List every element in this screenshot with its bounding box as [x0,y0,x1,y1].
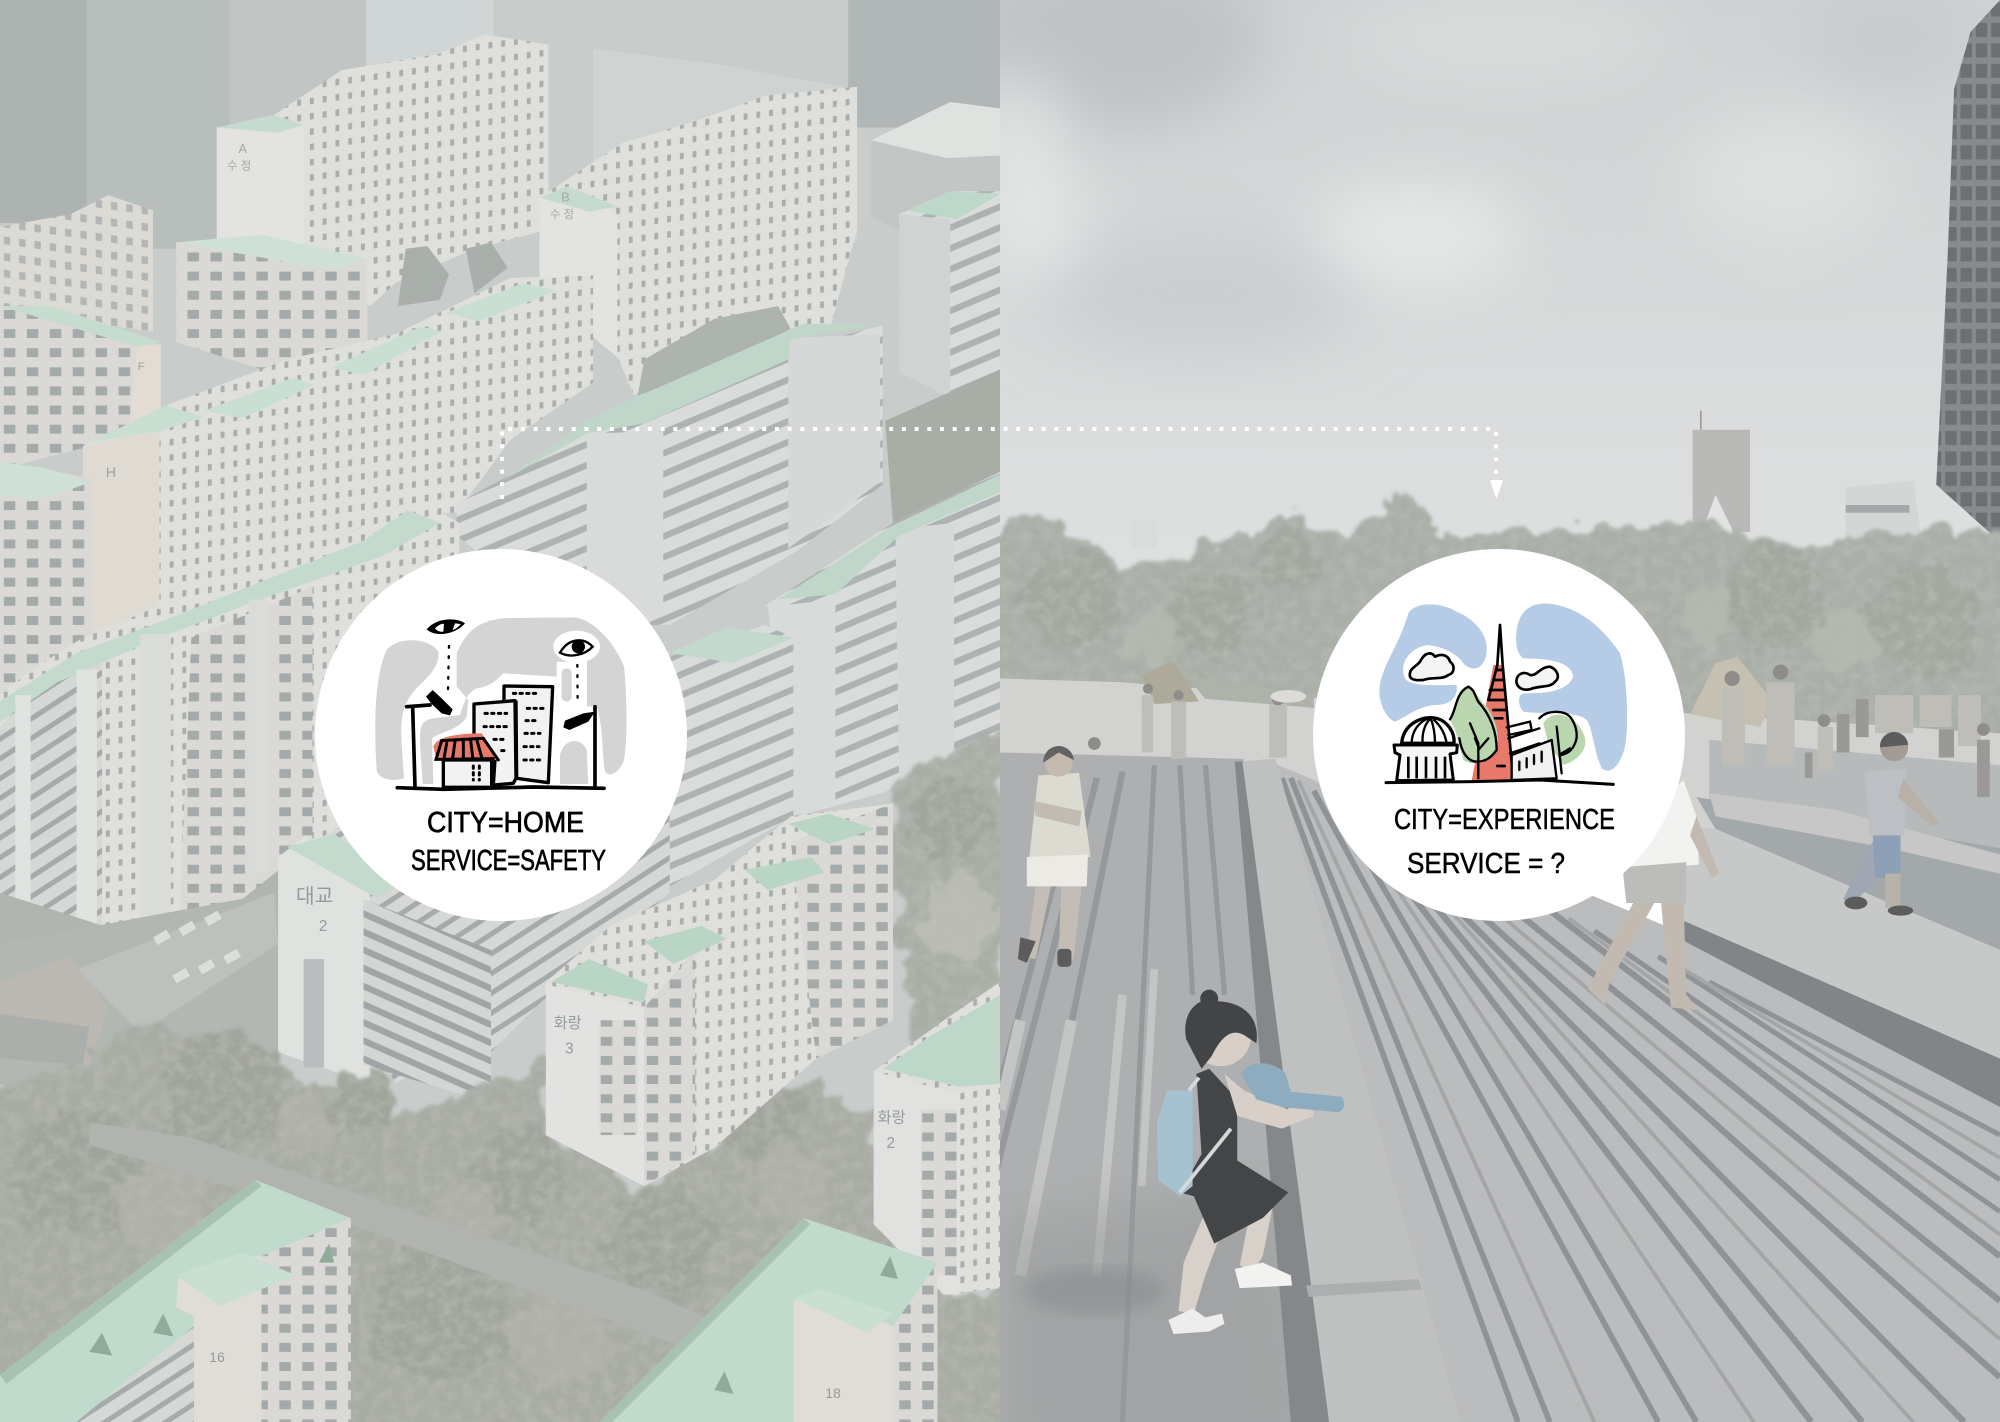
block B [540,87,857,395]
icon: surveillance over city sketch [375,617,626,789]
front left row [0,497,459,950]
building: block 16 [0,1180,351,1422]
right deck stripes fanning from vanishing point [1282,778,2000,1422]
long slab behind, upper row [457,324,1000,625]
windows [473,693,544,780]
red roof [433,733,498,761]
block B: 수 정 [550,208,574,221]
watching eyes [427,619,465,634]
road [90,1122,700,1345]
sky with clouds [1000,0,2000,572]
modern building [1512,740,1557,780]
ground line [1386,780,1613,784]
far plaza ground [1000,661,2000,918]
building: 화랑 3 block [546,803,893,1186]
trees at the right edge [890,730,1000,1044]
building: 대교 block: 대교 [296,885,333,908]
building: 대교 block [278,829,670,1103]
caption: service equals question mark: SERVICE = ? [1407,848,1565,880]
person: woman in checked shorts [1588,781,1719,1010]
circle: city as experience [1313,549,1685,921]
block F and right-hand tower [899,191,1000,408]
ground line and lamp posts [397,705,604,789]
building: 화랑 3 block: 화랑 [554,1015,582,1032]
side-on balcony blocks: F [138,361,145,373]
panel: aerial photo of apartment blocks [0,0,1046,1422]
block H row [0,275,593,714]
central mass below [0,650,670,1084]
caption: city equals home: CITY=HOME [427,807,584,839]
sight lines [448,646,578,704]
person: girl with water gun [1024,990,1344,1334]
building: block 16: 16 [209,1349,225,1365]
caption: service equals safety: SERVICE=SAFETY [411,845,606,877]
building: 화랑 3 block: 3 [565,1040,574,1057]
person: boy by water [1843,732,1939,916]
clouds [1410,653,1558,690]
parking and road [0,893,279,1087]
skyline towers [1692,0,2000,537]
distant crowd [1088,657,1990,797]
deck shadow and dark lower part [1011,1200,1290,1422]
tree right [1543,715,1585,765]
water pool and raised slab [1645,793,2000,1107]
left deck stripes [1000,765,1227,1422]
white halos around eye and sight line [553,631,600,710]
circle: city as home [315,549,687,921]
block A [217,34,548,306]
domed building [1402,718,1454,743]
tree line [1000,490,2000,734]
cameras [426,690,595,730]
red tower [1472,665,1513,781]
building: block 18: 18 [825,1385,841,1401]
block A: A [239,141,248,156]
panel: plaza photo with children at water feature [957,0,2000,1422]
dotted connector arrow from left circle to right circle [502,429,1503,499]
building sketches [443,686,553,787]
tree left [1450,687,1498,763]
building: 화랑 2 block [874,982,1000,1294]
block H row: H [106,464,116,480]
person: woman in white top [1018,746,1091,967]
block B: B [561,190,570,205]
forest between the blocks [0,1020,1046,1422]
pavement decks [969,752,2000,1422]
building: block 18 [599,1218,937,1422]
background towers [0,0,1001,249]
central stone kerb [1240,759,1460,1422]
caption: city equals experience: CITY=EXPERIENCE [1394,804,1615,836]
building: 화랑 2 block: 2 [886,1135,895,1152]
icon: open city sketch [1379,604,1627,784]
building: 화랑 2 block: 화랑 [878,1109,906,1126]
side-on balcony blocks [0,195,367,469]
arrowhead [1490,480,1503,499]
lower right slab [670,472,1000,886]
block A: 수 정 [227,160,251,173]
building: 대교 block: 2 [319,918,327,935]
